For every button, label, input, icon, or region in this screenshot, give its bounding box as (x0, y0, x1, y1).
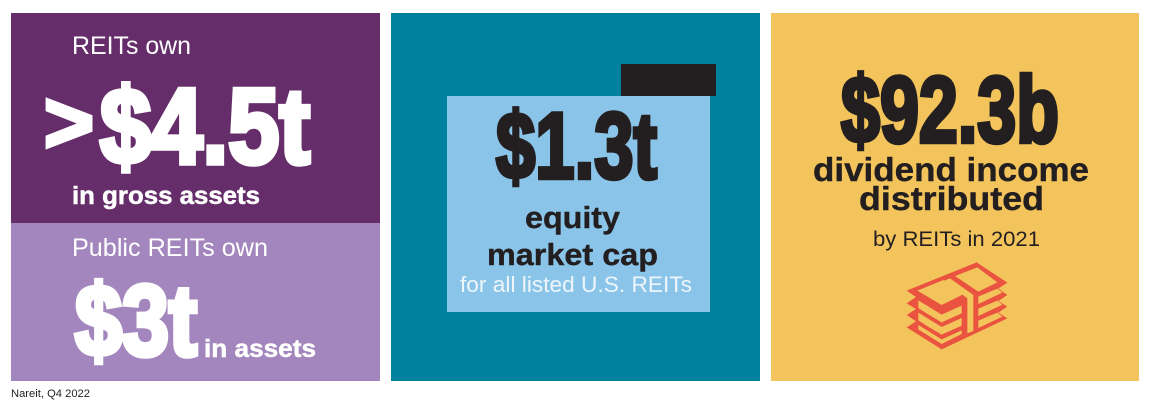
panel: equity market cap (391, 13, 760, 381)
source note: Nareit, Q4 2022 (11, 388, 90, 400)
heading: Public REITs own: Public REITs own (72, 234, 268, 262)
label: dividend income distributed: distributed (859, 180, 1044, 217)
label: equity market cap: market cap (487, 237, 658, 272)
panel: dividend income (771, 13, 1139, 381)
light blue card (447, 93, 710, 312)
icon: stack of money (907, 262, 1007, 349)
figure: 92.3 billion: $92.3b (841, 57, 1059, 162)
panel: public assets (11, 223, 380, 381)
label: in assets: in assets (204, 335, 316, 363)
note: all listed U.S. REITs: for all listed U.S. REITs (460, 272, 692, 297)
figure: greater than 4.5 trillion: > (44, 75, 94, 171)
figure: 1.3 trillion: $1.3t (496, 93, 657, 198)
label: dividend income distributed: dividend income (813, 151, 1089, 188)
decorative black block (621, 64, 716, 96)
note: by REITs in 2021: by REITs in 2021 (873, 228, 1040, 251)
label: equity market cap: equity (525, 200, 621, 235)
figure: greater than 4.5 trillion: $4.5t (100, 66, 310, 186)
panel: gross assets (11, 13, 380, 223)
heading: REITs own: REITs own (72, 32, 191, 60)
figure: 3 trillion: $3t (75, 265, 197, 377)
label: in gross assets: in gross assets (72, 182, 260, 210)
